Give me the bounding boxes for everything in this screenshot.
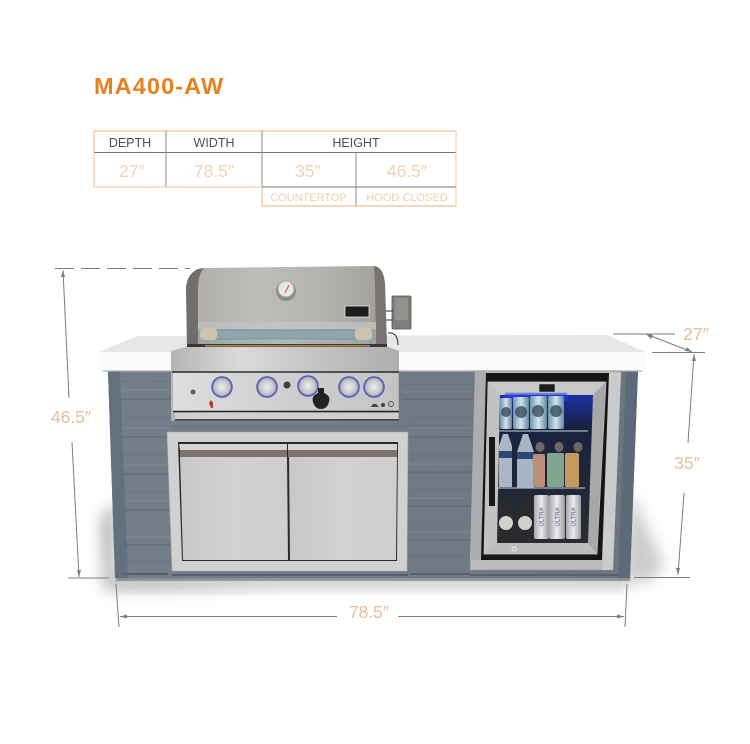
countertop bbox=[99, 335, 646, 371]
bottle opener bbox=[313, 388, 329, 409]
table headers: DEPTH bbox=[109, 136, 151, 150]
ultra cans: ULTRA bbox=[556, 507, 562, 527]
hood badge bbox=[345, 306, 369, 317]
fridge lock bbox=[512, 547, 516, 551]
shelf wires bbox=[498, 431, 588, 488]
right door bbox=[289, 456, 397, 560]
table headers: HEIGHT bbox=[332, 136, 380, 150]
igniter bbox=[190, 390, 196, 394]
cabinet planks bbox=[120, 381, 624, 562]
grill bbox=[171, 266, 411, 421]
fridge frame bbox=[470, 371, 621, 570]
table values: 78.5″ bbox=[194, 161, 234, 181]
grill lid seam bbox=[187, 344, 387, 348]
table sublabels bbox=[270, 192, 448, 204]
control panel bbox=[173, 373, 398, 411]
table values bbox=[119, 161, 427, 181]
table sublabels: COUNTERTOP bbox=[270, 192, 347, 204]
grill body bbox=[171, 347, 399, 421]
label 78.5: 78.5″ bbox=[349, 602, 389, 622]
fridge handle bbox=[489, 437, 495, 506]
title: MA400-AW bbox=[94, 73, 224, 99]
beer bottles bbox=[499, 497, 533, 541]
hood window bbox=[198, 322, 376, 344]
fridge door bbox=[484, 382, 606, 554]
knobs bbox=[212, 376, 384, 397]
wine bottle ends bbox=[536, 442, 582, 452]
flame logo bbox=[209, 400, 213, 408]
ultra cans: ULTRA bbox=[540, 507, 546, 527]
label 27: 27″ bbox=[683, 324, 709, 344]
dimension table bbox=[94, 131, 456, 206]
fridge bbox=[470, 371, 621, 570]
panel marks bbox=[371, 402, 394, 407]
cabinet end posts bbox=[108, 371, 128, 578]
floor shadow bbox=[100, 490, 664, 590]
table headers: WIDTH bbox=[194, 136, 234, 150]
table headers bbox=[109, 136, 380, 150]
water bottles bbox=[499, 434, 534, 488]
ultra cans: ULTRA bbox=[572, 507, 578, 527]
ultra cans bbox=[534, 495, 581, 539]
table values: 46.5″ bbox=[387, 161, 427, 181]
dimension: width bbox=[116, 584, 627, 627]
dimension: counter height bbox=[634, 354, 700, 578]
label 35: 35″ bbox=[674, 453, 700, 473]
grill hood bbox=[186, 266, 387, 346]
table sublabels: HOOD CLOSED bbox=[366, 192, 448, 204]
thermometer bbox=[276, 281, 296, 301]
table values: 27″ bbox=[119, 161, 145, 181]
cabinet bbox=[108, 371, 638, 578]
table values: 35″ bbox=[295, 161, 321, 181]
fridge glass bbox=[497, 395, 593, 543]
fridge badge bbox=[539, 384, 555, 392]
door handles bbox=[179, 444, 287, 450]
dimension: hood height bbox=[51, 268, 190, 578]
craft cans bbox=[533, 453, 579, 487]
left door bbox=[180, 456, 288, 560]
label 46.5: 46.5″ bbox=[51, 407, 91, 427]
rotisserie box bbox=[386, 296, 411, 345]
top shelf cans bbox=[500, 396, 564, 429]
hood handle bbox=[204, 330, 370, 339]
dimension: depth bbox=[613, 324, 709, 352]
storage doors bbox=[167, 432, 408, 571]
